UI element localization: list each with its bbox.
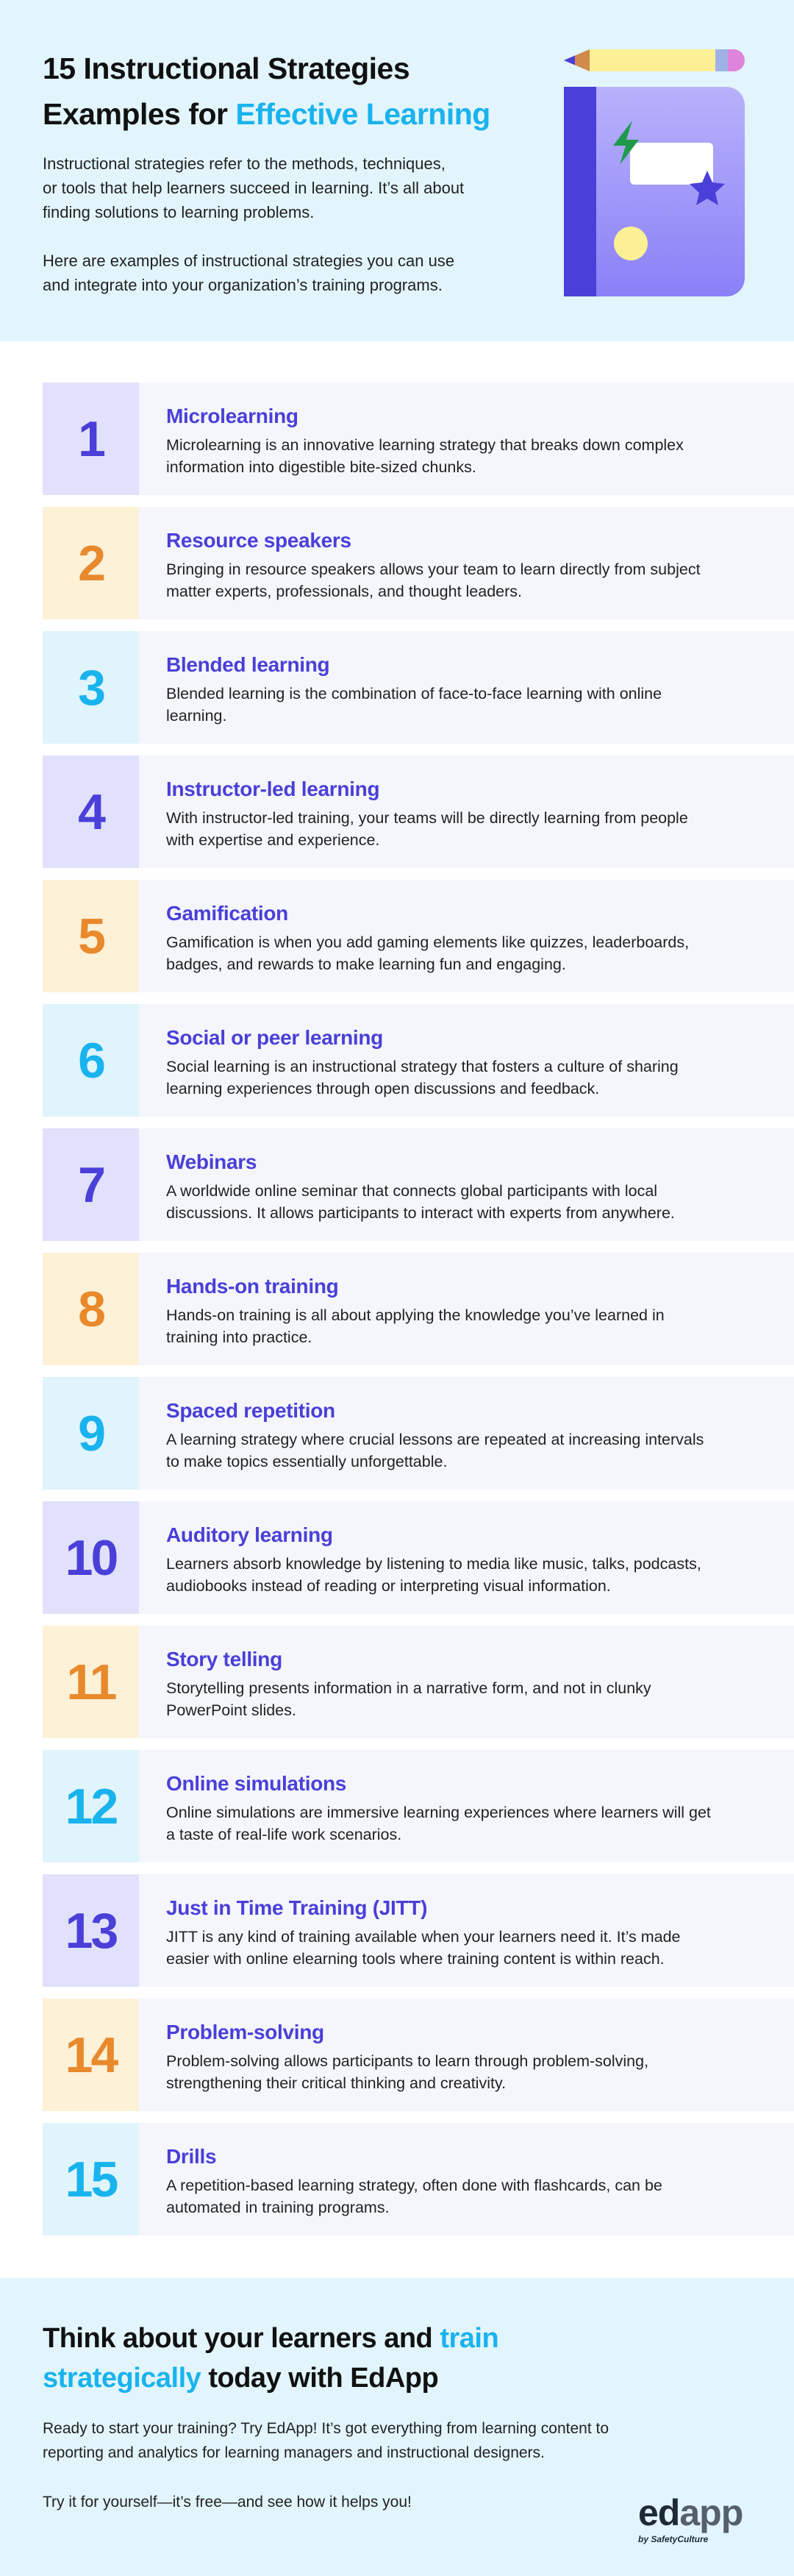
card 14 — [43, 1999, 794, 2111]
illustration: pencil and notebook — [564, 49, 745, 296]
card 4: Instructor-led learning — [166, 778, 379, 800]
card 3: Blended learning is the combination of face-to-face learning with online — [166, 685, 662, 702]
card 14: strengthening their critical thinking and creativity. — [166, 2074, 506, 2092]
card 11: Storytelling presents information in a narrative form, and not in clunky — [166, 1679, 651, 1697]
card 8 — [43, 1253, 794, 1365]
icon: notebook — [564, 87, 745, 296]
logo: edapp: edapp — [638, 2492, 743, 2533]
card 8: Hands-on training is all about applying the knowledge you’ve learned in — [166, 1306, 665, 1324]
card 14: 14 — [65, 2027, 116, 2083]
footer text — [43, 2420, 609, 2461]
card 2: Resource speakers — [166, 529, 351, 552]
card 14: Problem-solving allows participants to learn through problem-solving, — [166, 2052, 648, 2070]
title: 15 Instructional Strategies — [43, 51, 409, 85]
intro text: finding solutions to learning problems. — [43, 203, 314, 221]
card 12: Online simulations — [166, 1772, 346, 1795]
card 10: Learners absorb knowledge by listening to media like music, talks, podcasts, — [166, 1555, 701, 1573]
card 6: learning experiences through open discussions and feedback. — [166, 1080, 599, 1097]
intro text: Instructional strategies refer to the methods, techniques, — [43, 154, 446, 173]
card 15: automated in training programs. — [166, 2199, 390, 2216]
title — [43, 51, 490, 131]
card 2: matter experts, professionals, and thought leaders. — [166, 583, 522, 600]
card 13 — [43, 1874, 794, 1987]
card 11: 11 — [67, 1654, 115, 1709]
card 6 — [43, 1004, 794, 1117]
intro text: or tools that help learners succeed in learning. It’s all about — [43, 179, 464, 197]
card 12: Online simulations are immersive learning experiences where learners will get — [166, 1804, 711, 1821]
footer heading: strategically today with EdApp — [43, 2363, 438, 2394]
card 9 — [43, 1377, 794, 1490]
footer text: reporting and analytics for learning managers and instructional designers. — [43, 2444, 545, 2461]
card 1: information into digestible bite-sized chunks. — [166, 458, 476, 476]
card 13: easier with online elearning tools where training content is within reach. — [166, 1950, 665, 1968]
card 5 — [43, 880, 794, 992]
card 9: 9 — [78, 1405, 104, 1461]
footer panel — [0, 2278, 794, 2576]
card 5: Gamification — [166, 902, 288, 925]
card 8: training into practice. — [166, 1328, 312, 1346]
footer text 2: Try it for yourself—it’s free—and see how it helps you! — [43, 2494, 412, 2511]
card 1: Microlearning — [166, 405, 298, 427]
card 4: with expertise and experience. — [166, 831, 379, 849]
card 4: With instructor-led training, your teams will be directly learning from people — [166, 809, 688, 827]
card 9: Spaced repetition — [166, 1399, 335, 1422]
card 5: Gamification is when you add gaming elements like quizzes, leaderboards, — [166, 933, 689, 951]
card 4 — [43, 755, 794, 868]
card 3: learning. — [166, 707, 226, 725]
card 15: A repetition-based learning strategy, often done with flashcards, can be — [166, 2177, 662, 2194]
card 3: Blended learning — [166, 653, 329, 676]
card 11: PowerPoint slides. — [166, 1701, 296, 1719]
card 9: to make topics essentially unforgettable. — [166, 1453, 447, 1470]
intro text: Here are examples of instructional strategies you can use — [43, 252, 454, 270]
icon: pencil — [564, 49, 745, 71]
card 7: discussions. It allows participants to interact with experts from anywhere. — [166, 1204, 675, 1222]
card 4: 4 — [78, 784, 104, 840]
card 2: 2 — [78, 536, 104, 591]
card 13: Just in Time Training (JITT) — [166, 1896, 427, 1919]
footer heading — [43, 2323, 498, 2394]
card 2: Bringing in resource speakers allows your team to learn directly from subject — [166, 561, 701, 578]
card 7: Webinars — [166, 1150, 257, 1173]
header panel — [0, 0, 794, 341]
card 3 — [43, 631, 794, 744]
card 13: 13 — [65, 1902, 116, 1958]
card 12: 12 — [65, 1779, 116, 1835]
footer heading: Think about your learners and train — [43, 2323, 498, 2354]
card 3: 3 — [78, 659, 104, 715]
card 1: 1 — [78, 410, 104, 466]
card 13: JITT is any kind of training available when your learners need it. It’s made — [166, 1928, 681, 1946]
card 8: 8 — [78, 1281, 104, 1337]
card 2 — [43, 507, 794, 619]
card 11 — [43, 1626, 794, 1738]
intro text — [43, 154, 464, 294]
card 7: 7 — [78, 1156, 104, 1212]
card 10: Auditory learning — [166, 1523, 333, 1546]
footer text: Ready to start your training? Try EdApp! It’s got everything from learning content to — [43, 2420, 609, 2437]
card 6: 6 — [78, 1033, 104, 1089]
card 15 — [43, 2123, 794, 2235]
intro text: and integrate into your organization’s training programs. — [43, 276, 443, 294]
logo: edapp: by SafetyCulture — [638, 2534, 708, 2544]
card 5: badges, and rewards to make learning fun and engaging. — [166, 956, 566, 973]
card 1 — [43, 383, 794, 495]
card 15: 15 — [65, 2151, 116, 2207]
card 7 — [43, 1128, 794, 1241]
card 6: Social or peer learning — [166, 1026, 383, 1049]
card 7: A worldwide online seminar that connects global participants with local — [166, 1182, 657, 1200]
card 10 — [43, 1501, 794, 1614]
card 10: audiobooks instead of reading or interpreting visual information. — [166, 1577, 611, 1595]
card 12 — [43, 1750, 794, 1862]
title: Examples for Effective Learning — [43, 97, 490, 131]
card 14: Problem-solving — [166, 2021, 324, 2043]
card 1: Microlearning is an innovative learning strategy that breaks down complex — [166, 436, 684, 454]
card 9: A learning strategy where crucial lessons are repeated at increasing intervals — [166, 1431, 704, 1448]
card 5: 5 — [78, 908, 104, 964]
card 6: Social learning is an instructional strategy that fosters a culture of sharing — [166, 1058, 679, 1075]
card 8: Hands-on training — [166, 1275, 338, 1298]
card 10: 10 — [65, 1530, 116, 1586]
card 15: Drills — [166, 2145, 216, 2168]
card 12: a taste of real-life work scenarios. — [166, 1826, 401, 1843]
card 11: Story telling — [166, 1648, 282, 1671]
